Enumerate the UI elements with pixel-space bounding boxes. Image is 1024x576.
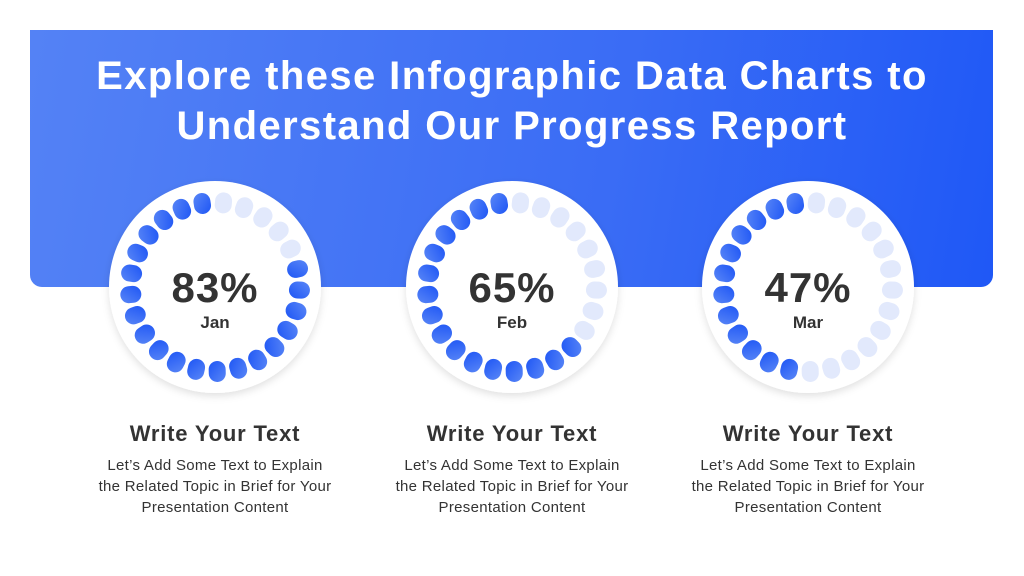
banner bbox=[30, 30, 993, 287]
text: Let’s Add Some Text to Explain bbox=[700, 457, 916, 474]
dial: 65%: Feb bbox=[497, 313, 527, 332]
text bbox=[98, 457, 331, 516]
text: Presentation Content bbox=[735, 499, 881, 516]
heading: Write Your Text bbox=[130, 421, 300, 446]
dial: 83%: 83% bbox=[171, 264, 259, 311]
text: Let’s Add Some Text to Explain bbox=[107, 457, 323, 474]
dial: 47% bbox=[700, 181, 916, 398]
dial: 83%: Jan bbox=[200, 313, 230, 332]
heading: Write Your Text bbox=[723, 421, 893, 446]
panel: Mar bbox=[692, 181, 924, 516]
title bbox=[96, 54, 928, 148]
text: the Related Topic in Brief for Your bbox=[99, 478, 331, 495]
text: Presentation Content bbox=[142, 499, 288, 516]
dial: 65% bbox=[404, 181, 620, 398]
panel: Feb bbox=[396, 181, 628, 516]
text bbox=[396, 457, 628, 516]
text bbox=[692, 457, 924, 516]
heading: Write Your Text bbox=[427, 421, 597, 446]
dial: 65%: 65% bbox=[468, 264, 556, 311]
dial: 83% bbox=[106, 181, 324, 398]
text: the Related Topic in Brief for Your bbox=[396, 478, 628, 495]
panel: Jan bbox=[98, 181, 331, 516]
dial: 47%: 47% bbox=[764, 264, 852, 311]
title: Understand Our Progress Report bbox=[176, 104, 848, 148]
dial: 47%: Mar bbox=[793, 313, 823, 332]
title: Explore these Infographic Data Charts to bbox=[96, 54, 928, 98]
text: the Related Topic in Brief for Your bbox=[692, 478, 924, 495]
text: Let’s Add Some Text to Explain bbox=[404, 457, 620, 474]
text: Presentation Content bbox=[439, 499, 585, 516]
